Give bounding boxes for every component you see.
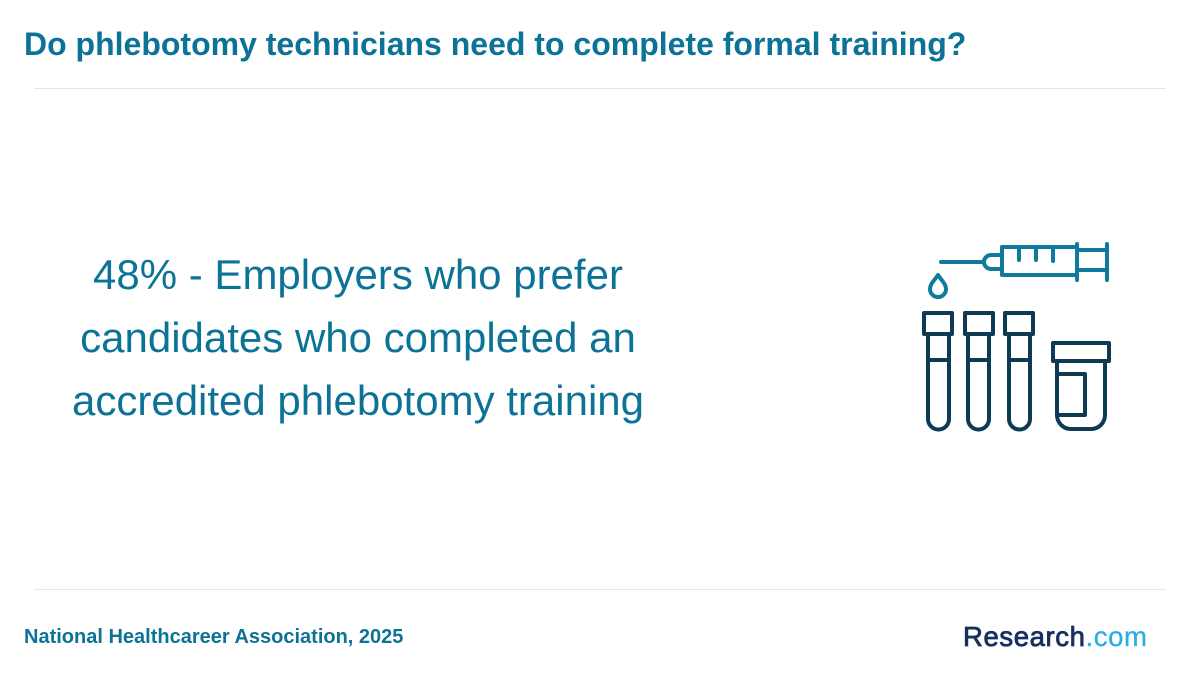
icon: test tubes [924,313,1033,430]
statistic text: accredited phlebotomy training [72,377,644,424]
logo: Research.com: Research.com [963,621,1148,652]
statistic text [72,251,644,424]
icon: blood drop [930,275,946,297]
title: Do phlebotomy technicians need to complete formal training? [24,26,966,62]
source text: National Healthcareer Association, 2025 [24,626,403,648]
icon: syringe [941,244,1107,280]
statistic text: 48% - Employers who prefer [93,251,623,298]
icon: sample jar [1053,343,1109,429]
icon: syringe and sample tubes [922,242,1111,432]
statistic text: candidates who completed an [80,314,636,361]
